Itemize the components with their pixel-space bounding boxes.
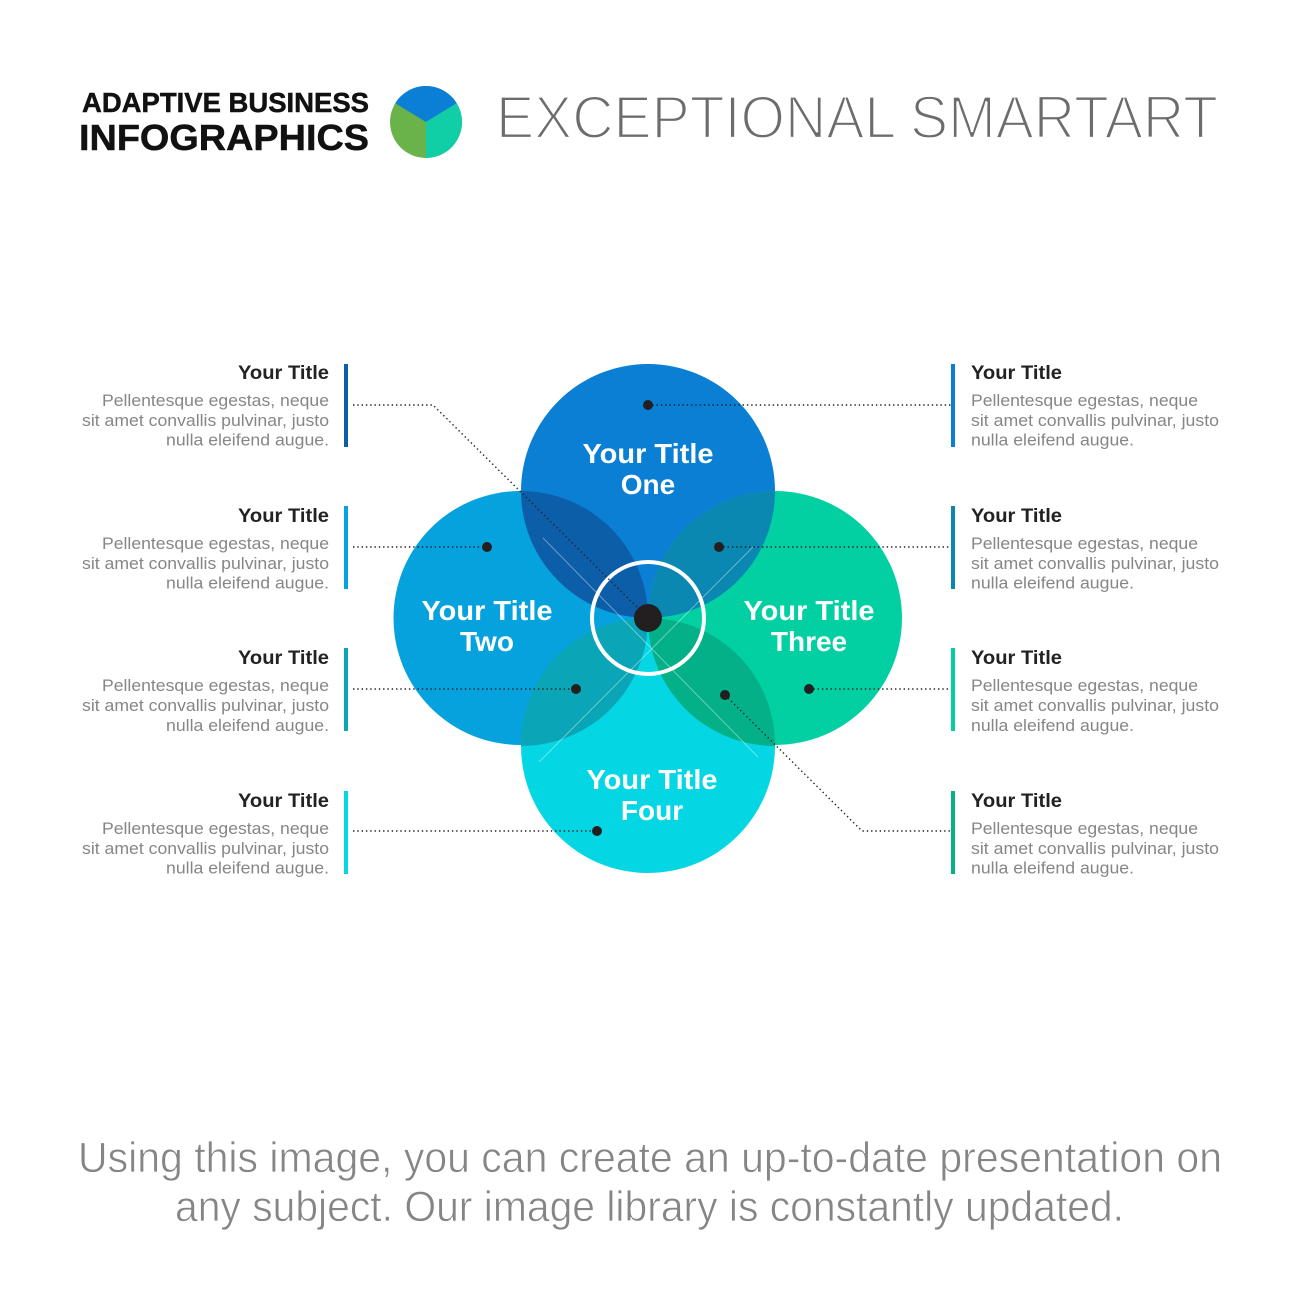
panel: left 2: Pellentesque egestas, neque [102,534,329,553]
panel: right 2: Pellentesque egestas, neque [971,534,1198,553]
panel: right 2: Your Title [971,506,1062,527]
connector: left 3 [353,688,576,690]
panel: left 4 [82,791,348,878]
panel: left 3: Pellentesque egestas, neque [102,676,329,695]
panel: right 1: nulla eleifend augue. [971,430,1134,450]
panel: left 2 [82,506,348,592]
panel: left 1 [82,363,348,450]
panel: left 3: Your Title [238,648,329,669]
panel: left 3: sit amet convallis pulvinar, justo [82,696,329,715]
footer text: any subject. Our image library is constantly updated. [175,1183,1124,1231]
label: one: Your Title [582,438,714,469]
panel: left 1: nulla eleifend augue. [166,430,329,450]
connector: right 4 [725,695,951,831]
connector: right 3 [809,688,951,690]
label: two: Your Title [422,595,552,626]
overlap: one and three [648,491,775,618]
panel: right 4: sit amet convallis pulvinar, justo [971,839,1219,858]
footer text [78,1134,1222,1231]
connector: right 2 [719,546,951,548]
label: two: Two [460,626,514,657]
panel: right 3: nulla eleifend augue. [971,716,1134,735]
panel: right 1: sit amet convallis pulvinar, justo [971,411,1219,430]
header [79,84,1218,158]
label: three [744,595,874,657]
connectors [353,400,951,836]
center ring [592,562,704,674]
panel: right 2: sit amet convallis pulvinar, justo [971,554,1219,573]
panel: right 3: Your Title [971,648,1062,669]
venn diagram [394,364,902,873]
overlap: one and two [521,491,648,618]
label: one [582,438,714,500]
label: four: Your Title [586,764,718,795]
panel: left 4: sit amet convallis pulvinar, justo [82,839,329,858]
connector: left 1 [353,405,648,618]
panel: left 4: Pellentesque egestas, neque [102,819,329,838]
panel: right 2: nulla eleifend augue. [971,574,1134,592]
circle: one [521,364,775,618]
brand title: ADAPTIVE BUSINESS [82,87,369,118]
panel: left 1: Your Title [238,363,329,384]
footer text: Using this image, you can create an up-to-date presentation on [78,1134,1222,1182]
panel: right 3: sit amet convallis pulvinar, justo [971,696,1219,715]
connector end dots [482,400,814,836]
panel: left 3 [82,648,348,735]
connector: left 2 [353,546,487,548]
circle: three [648,491,902,745]
panel: right 4: Pellentesque egestas, neque [971,819,1198,838]
label: four [586,764,718,826]
label: one: One [621,469,675,500]
label: three: Your Title [744,595,874,626]
overlap: two and four [521,618,648,746]
brand title [79,87,369,158]
panel: left 4: Your Title [238,791,329,812]
panel: left 2: sit amet convallis pulvinar, justo [82,554,329,573]
panel: right 1: Your Title [971,363,1062,384]
panel: right 4 [951,791,1219,878]
panel: right 2 [951,506,1219,592]
panel: right 4: Your Title [971,791,1062,812]
label: three: Three [771,626,847,657]
panel: left 2: nulla eleifend augue. [166,574,329,592]
connector: left 4 [353,830,597,832]
icon: logo pie [390,86,462,158]
panel: right 1: Pellentesque egestas, neque [971,391,1198,410]
panel: right 1 [951,363,1219,450]
brand title: INFOGRAPHICS [79,117,369,158]
panel: right 4: nulla eleifend augue. [971,858,1134,878]
panel: right 3 [951,648,1219,735]
overlap: three and four [648,618,775,746]
panel: left 4: nulla eleifend augue. [166,858,329,878]
thin diagonal highlights [539,538,758,762]
label: four: Four [621,795,683,826]
main heading: EXCEPTIONAL SMARTART [496,84,1218,151]
panel: left 1: sit amet convallis pulvinar, justo [82,411,329,430]
panel: left 3: nulla eleifend augue. [166,716,329,735]
label: two [422,595,552,657]
panel: right 3: Pellentesque egestas, neque [971,676,1198,695]
circle: two [394,491,648,745]
connector: right 1 [648,404,951,406]
panel: left 2: Your Title [238,506,329,527]
circle: four [521,619,775,873]
center hub [634,604,662,632]
panel: left 1: Pellentesque egestas, neque [102,391,329,410]
